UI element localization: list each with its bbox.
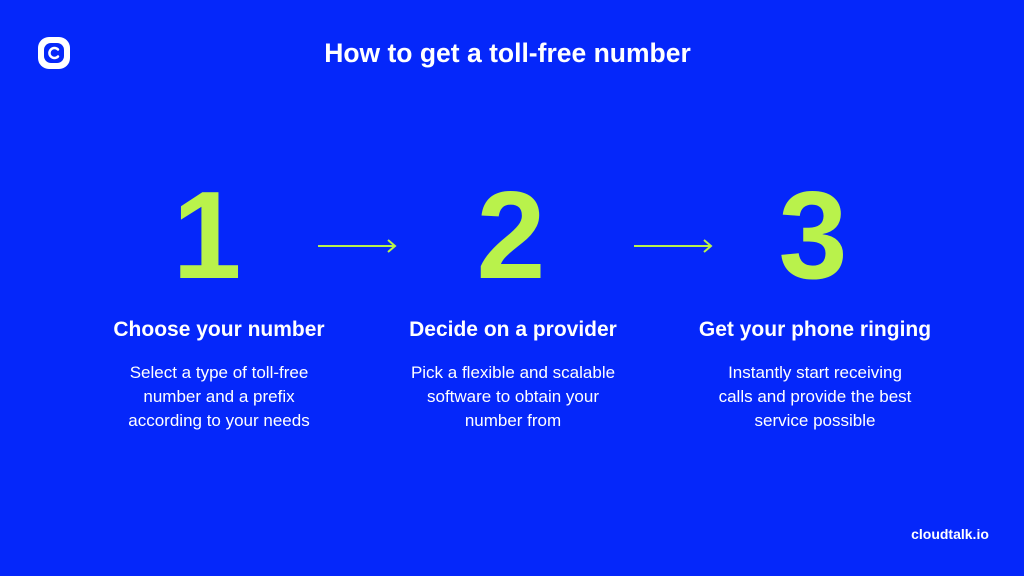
number 1: 1 bbox=[173, 167, 241, 305]
step 2 heading: Decide on a provider bbox=[409, 318, 617, 341]
step 2 text: Pick a flexible and scalable bbox=[411, 363, 615, 382]
title: How to get a toll-free number bbox=[324, 38, 691, 68]
step 2 text: number from bbox=[465, 411, 561, 430]
step 1 text: number and a prefix bbox=[143, 387, 295, 406]
footer brand: cloudtalk.io bbox=[911, 526, 989, 542]
number 3: 3 bbox=[779, 167, 847, 305]
step 3 text bbox=[719, 363, 912, 430]
logo bbox=[38, 37, 70, 69]
step 1 heading: Choose your number bbox=[113, 318, 325, 341]
step 2 text bbox=[411, 363, 615, 430]
number 2: 2 bbox=[477, 167, 545, 305]
step 1 text bbox=[128, 363, 310, 430]
arrow 1 bbox=[318, 239, 396, 253]
step 3 text: service possible bbox=[755, 411, 875, 430]
step 3 text: calls and provide the best bbox=[719, 387, 911, 406]
step 2 text: software to obtain your bbox=[427, 387, 599, 406]
step 3 text: Instantly start receiving bbox=[728, 363, 902, 382]
arrow 2 bbox=[634, 239, 712, 253]
step 1 text: Select a type of toll-free bbox=[130, 363, 308, 382]
step 1 text: according to your needs bbox=[128, 411, 310, 430]
step 3 heading: Get your phone ringing bbox=[699, 318, 931, 341]
